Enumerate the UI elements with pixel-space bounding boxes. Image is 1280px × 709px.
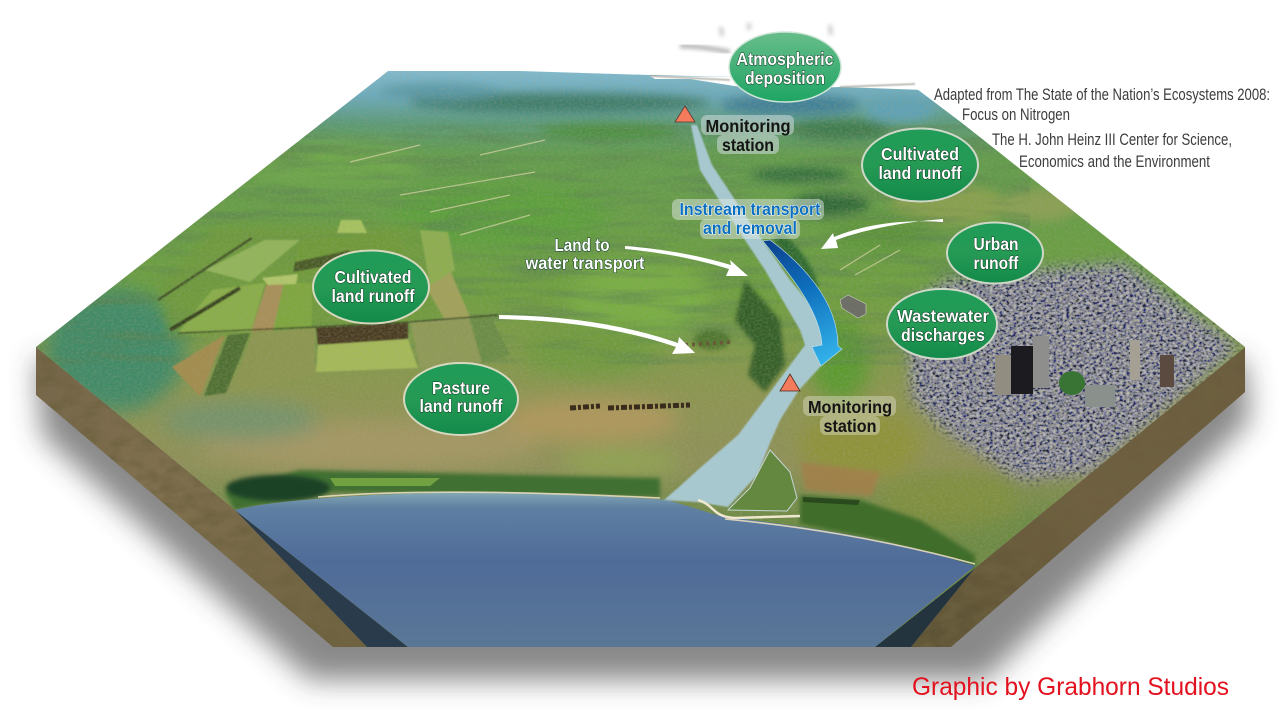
right soil slab side — [905, 340, 1250, 650]
bubble: atmospheric deposition: Atmospheric — [736, 49, 834, 69]
land texture — [30, 65, 1250, 655]
riparian forest — [694, 228, 824, 392]
label: monitoring station upstream — [701, 115, 794, 155]
bubble: atmospheric deposition — [729, 32, 841, 102]
label: monitoring station downstream: Monitoring — [808, 397, 892, 417]
bubble: pasture land runoff — [404, 363, 518, 435]
bubble: urban runoff — [947, 222, 1043, 284]
arrow: runoff to floodplain — [499, 315, 695, 354]
label: instream transport and removal: and removal — [703, 218, 797, 238]
label: monitoring station downstream — [803, 396, 896, 436]
land surface — [30, 65, 1260, 655]
label: land to water transport — [525, 235, 645, 273]
label: land to water transport: Land to — [554, 235, 610, 255]
cow herd — [570, 342, 730, 408]
label: monitoring station upstream: station — [722, 135, 774, 155]
tan pasture — [160, 398, 680, 474]
estuary island — [728, 450, 797, 511]
hedgerow stripes — [30, 125, 1030, 365]
bubble: pasture land runoff: Pasture — [432, 378, 490, 398]
bubble: cultivated land runoff left: Cultivated — [334, 267, 412, 287]
graphic attribution: Graphic by Grabhorn Studios — [912, 673, 1229, 701]
label: monitoring station downstream: station — [824, 416, 876, 436]
green slopes — [240, 143, 1020, 528]
cloud band — [650, 23, 925, 90]
treatment plant — [840, 295, 866, 318]
arrow: instream transport — [763, 240, 842, 366]
arrow: land to water transport — [625, 246, 748, 276]
bubble: urban runoff: runoff — [974, 253, 1019, 273]
label: monitoring station upstream: Monitoring — [706, 116, 790, 136]
sand spit — [698, 500, 800, 518]
hillside terraces — [350, 140, 900, 275]
coastal strip — [225, 462, 975, 570]
bubble: wastewater discharges: discharges — [901, 325, 985, 345]
teal lowland — [45, 288, 185, 412]
label: land to water transport: water transport — [525, 253, 645, 273]
bubble: wastewater discharges: Wastewater — [897, 306, 989, 326]
bubble: cultivated land runoff right: Cultivated — [881, 144, 959, 164]
bubble: cultivated land runoff left: land runoff — [332, 286, 415, 306]
label: instream transport and removal: Instream transport — [680, 199, 821, 219]
left soil slab side — [30, 340, 375, 650]
source credit — [934, 85, 1270, 171]
sea — [235, 492, 975, 647]
label: instream transport and removal — [672, 199, 824, 239]
dark water side wedges — [235, 510, 975, 647]
source credit: Economics and the Environment — [1019, 152, 1210, 171]
field mosaic — [158, 220, 510, 396]
source credit: Focus on Nitrogen — [962, 105, 1070, 124]
river and estuary — [664, 125, 838, 507]
arrow: cultivated land to river — [821, 219, 943, 249]
bubble: wastewater discharges — [887, 289, 997, 359]
block shadow — [36, 360, 1250, 680]
bubble: cultivated land runoff left — [313, 250, 429, 324]
bubble: cultivated land runoff right: land runoff — [878, 163, 962, 183]
monitoring station marker downstream — [780, 374, 800, 391]
bubble: pasture land runoff: land runoff — [420, 396, 503, 416]
shoreline — [318, 492, 975, 564]
city — [900, 253, 1244, 488]
bubble: cultivated land runoff right — [862, 128, 978, 202]
monitoring station marker upstream — [675, 106, 695, 122]
distant hills — [380, 84, 1080, 225]
bubble: urban runoff: Urban — [974, 234, 1018, 254]
bubble: atmospheric deposition: deposition — [745, 68, 825, 88]
